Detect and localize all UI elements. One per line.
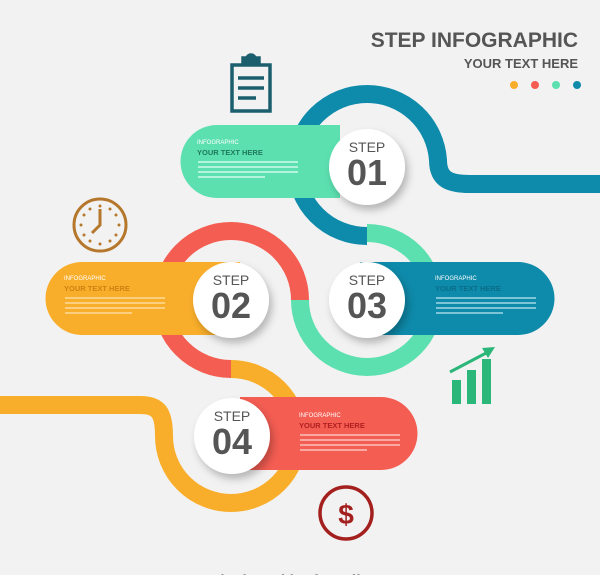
step 01 circle [329,129,405,205]
panel: step 04 pill [240,397,418,470]
panel: step 03 pill: INFOGRAPHIC [435,276,477,282]
step 02 circle [193,262,269,338]
path: red [162,231,300,369]
step 02 circle: 02 [211,285,251,326]
icon: dollar: $ [338,499,354,530]
step 01 circle: STEP [349,139,385,155]
icon: clock [74,199,126,251]
title: YOUR TEXT HERE [464,56,578,71]
title [371,29,581,89]
panel: step 02 pill: INFOGRAPHIC [64,276,106,282]
path: green [300,233,434,367]
path: orange [0,369,298,503]
step 03 circle: 03 [347,285,387,326]
panel: step 01 pill: YOUR TEXT HERE [197,148,263,157]
icon: clipboard [232,55,270,111]
panel: step 03 pill [360,262,554,335]
step 03 circle: STEP [349,272,385,288]
panel: step 04 pill: INFOGRAPHIC [299,413,341,419]
step 04 circle: STEP [214,408,250,424]
step 03 circle [329,262,405,338]
path: blue [296,94,600,236]
panel: step 02 pill: YOUR TEXT HERE [64,284,130,293]
panel: step 01 pill: INFOGRAPHIC [197,140,239,146]
step 02 circle: STEP [213,272,249,288]
icon: dollar [320,487,372,539]
step 04 circle [194,398,270,474]
panel: step 04 pill: YOUR TEXT HERE [299,421,365,430]
panel: step 02 pill [46,262,240,335]
panel: step 03 pill: YOUR TEXT HERE [435,284,501,293]
panel: step 01 pill [181,125,340,198]
title: STEP INFOGRAPHIC [371,29,578,52]
step 01 circle: 01 [347,152,387,193]
step 04 circle: 04 [212,421,252,462]
icon: bar chart [450,347,495,404]
